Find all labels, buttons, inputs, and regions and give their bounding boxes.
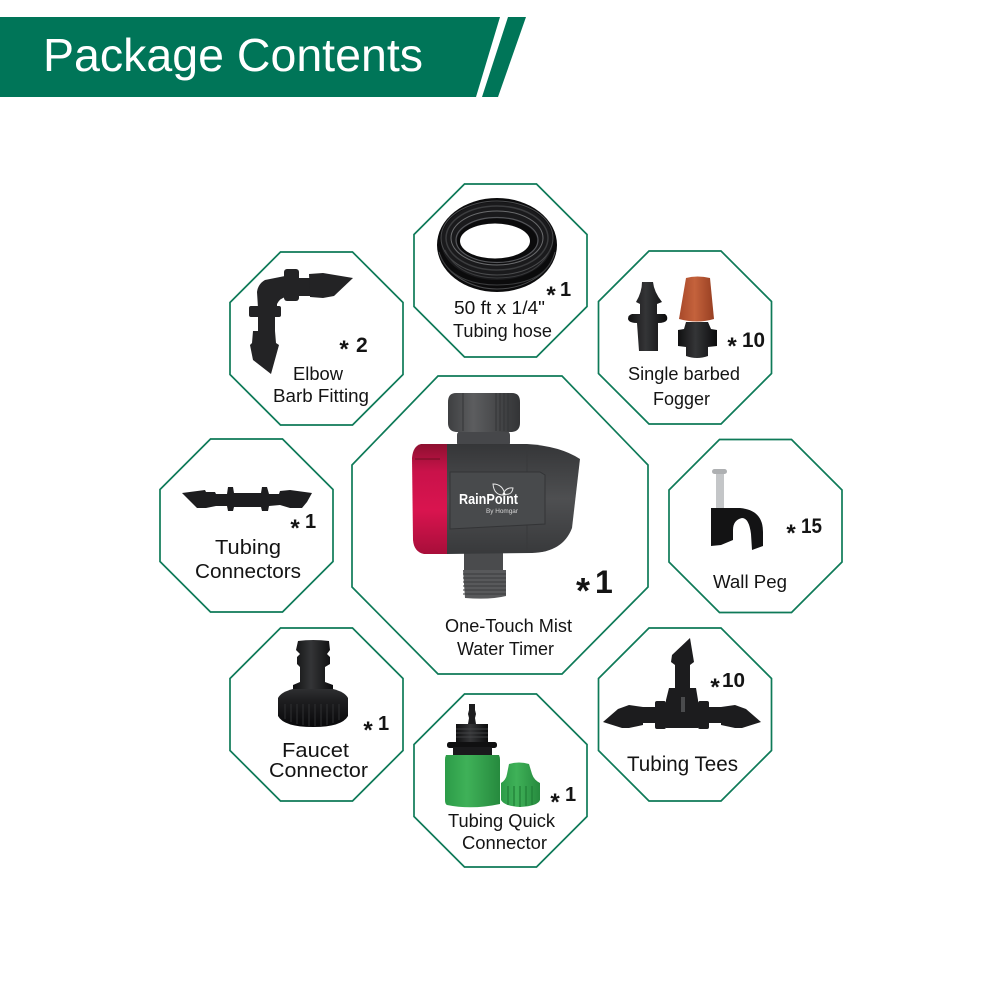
quantity: 10 (742, 329, 765, 352)
panel: faucet connector (230, 628, 403, 801)
label: Faucet (282, 740, 349, 762)
quantity: 1 (560, 279, 571, 301)
icon: water timer (412, 393, 580, 599)
logo text: By Homgar (486, 508, 519, 515)
logo text: RainPoint (459, 491, 518, 508)
label: Tubing Quick (448, 811, 556, 831)
label: 50 ft x 1/4" (454, 298, 545, 318)
quantity: * (710, 674, 720, 701)
quantity (339, 334, 368, 363)
quantity: * (786, 520, 796, 547)
quantity (786, 515, 822, 547)
label: Water Timer (457, 639, 554, 659)
panel: tubing connectors (160, 439, 333, 612)
label: Tubing hose (453, 321, 552, 341)
quantity: * (363, 717, 373, 744)
quantity: 1 (305, 511, 316, 533)
label: Connector (269, 760, 368, 782)
label (448, 811, 556, 853)
title: Package Contents (43, 29, 423, 81)
label (628, 364, 740, 409)
label: One-Touch Mist (445, 616, 572, 636)
quantity: * (546, 282, 556, 309)
quantity: 1 (378, 713, 389, 735)
icon: tee fitting (603, 638, 761, 729)
panel: tubing hose (414, 184, 587, 357)
quantity: * (727, 333, 737, 360)
label (453, 298, 552, 341)
label: Barb Fitting (273, 386, 369, 406)
quantity (550, 784, 576, 816)
quantity: 1 (595, 564, 613, 600)
quantity: 15 (801, 515, 822, 538)
quantity: * (339, 336, 349, 363)
quantity (727, 329, 765, 360)
logo text (459, 491, 519, 515)
quantity (363, 713, 389, 744)
label: Fogger (653, 389, 710, 409)
icon: quick connector (445, 704, 540, 807)
label: Tubing (215, 536, 281, 559)
panel: elbow barb (230, 252, 403, 425)
label: Connectors (195, 560, 301, 583)
panel: tubing tees (598, 628, 772, 801)
panel: wall peg (669, 440, 842, 612)
quantity: 2 (356, 334, 368, 357)
icon: orange fogger (678, 276, 717, 358)
quantity: * (576, 570, 590, 611)
panel: fogger (598, 251, 772, 424)
label: Connector (462, 833, 547, 853)
icon: wall peg (711, 469, 763, 550)
quantity: * (290, 515, 300, 542)
icon: barbed connector (628, 282, 667, 351)
icon: hose coil (437, 198, 557, 292)
quantity: 1 (565, 784, 576, 806)
icon: faucet connector (278, 640, 348, 727)
quantity (546, 279, 571, 309)
quantity: * (550, 789, 560, 816)
quantity: 10 (722, 670, 745, 692)
label (445, 616, 572, 659)
icon: elbow fitting (249, 269, 353, 374)
label: Wall Peg (713, 572, 787, 592)
label: Tubing Tees (627, 753, 738, 776)
label: Single barbed (628, 364, 740, 384)
icon: straight connector (182, 487, 312, 511)
quantity (290, 511, 316, 542)
label (195, 536, 301, 583)
label (269, 740, 368, 782)
label (273, 364, 369, 406)
label: Elbow (293, 364, 344, 384)
quantity (710, 670, 745, 701)
title banner (0, 17, 526, 97)
panel: water timer (352, 376, 648, 674)
panel: tubing quick connector (414, 694, 587, 867)
quantity (576, 564, 613, 611)
